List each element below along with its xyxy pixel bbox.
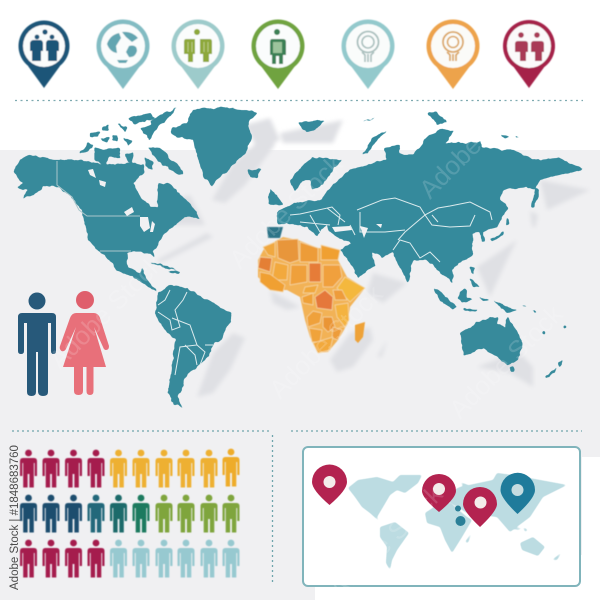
australia and oceania [460,317,566,378]
watermark text: Adobe Stock [223,148,349,274]
pictogram people grid [20,449,240,578]
caspian and black seas [332,224,382,238]
main world map [13,107,583,408]
world map shadows [155,118,590,397]
woman figure [60,291,109,395]
pin: green person [252,20,304,89]
teal dots [455,506,466,526]
spain [267,227,283,238]
asia country borders [290,198,492,262]
pin: navy people [18,20,70,88]
pin: orange ring [426,20,480,89]
large man and woman figures [18,291,109,396]
africa [258,237,365,353]
dotted dividers bottom [12,431,582,585]
pin: globe [96,20,150,89]
pin: crimson centre left [422,474,456,512]
watermark text: Adobe Stock [263,278,389,404]
great lakes [88,169,155,232]
row 2 people [20,495,240,532]
north america [13,107,200,292]
madagascar [355,322,365,343]
pin: crimson centre right [463,487,497,527]
watermark text: Adobe Stock [43,248,169,374]
watermark text [43,78,569,600]
eurasia [267,112,583,313]
row 1 people [20,449,240,488]
pin: two olive people [172,20,224,89]
man figure [18,292,56,396]
canada and mexico borders [57,161,140,251]
dotted divider top [15,100,583,102]
iceland [248,169,262,177]
greenland [172,107,258,187]
row of location pin icons [18,20,555,89]
pin: blue right [500,473,535,514]
panel: small map with pins [303,447,580,586]
small world map [348,473,567,570]
watermark text: Adobe Stock [413,78,539,204]
row 3 people [20,540,240,578]
pin: crimson people [503,20,555,88]
stock id caption: Adobe Stock | #1848683760 [9,445,21,590]
watermark text: Adobe Stock [443,298,569,424]
pin: crimson far left [312,465,347,505]
south america [155,285,232,408]
pin: light blue ring [342,20,394,89]
